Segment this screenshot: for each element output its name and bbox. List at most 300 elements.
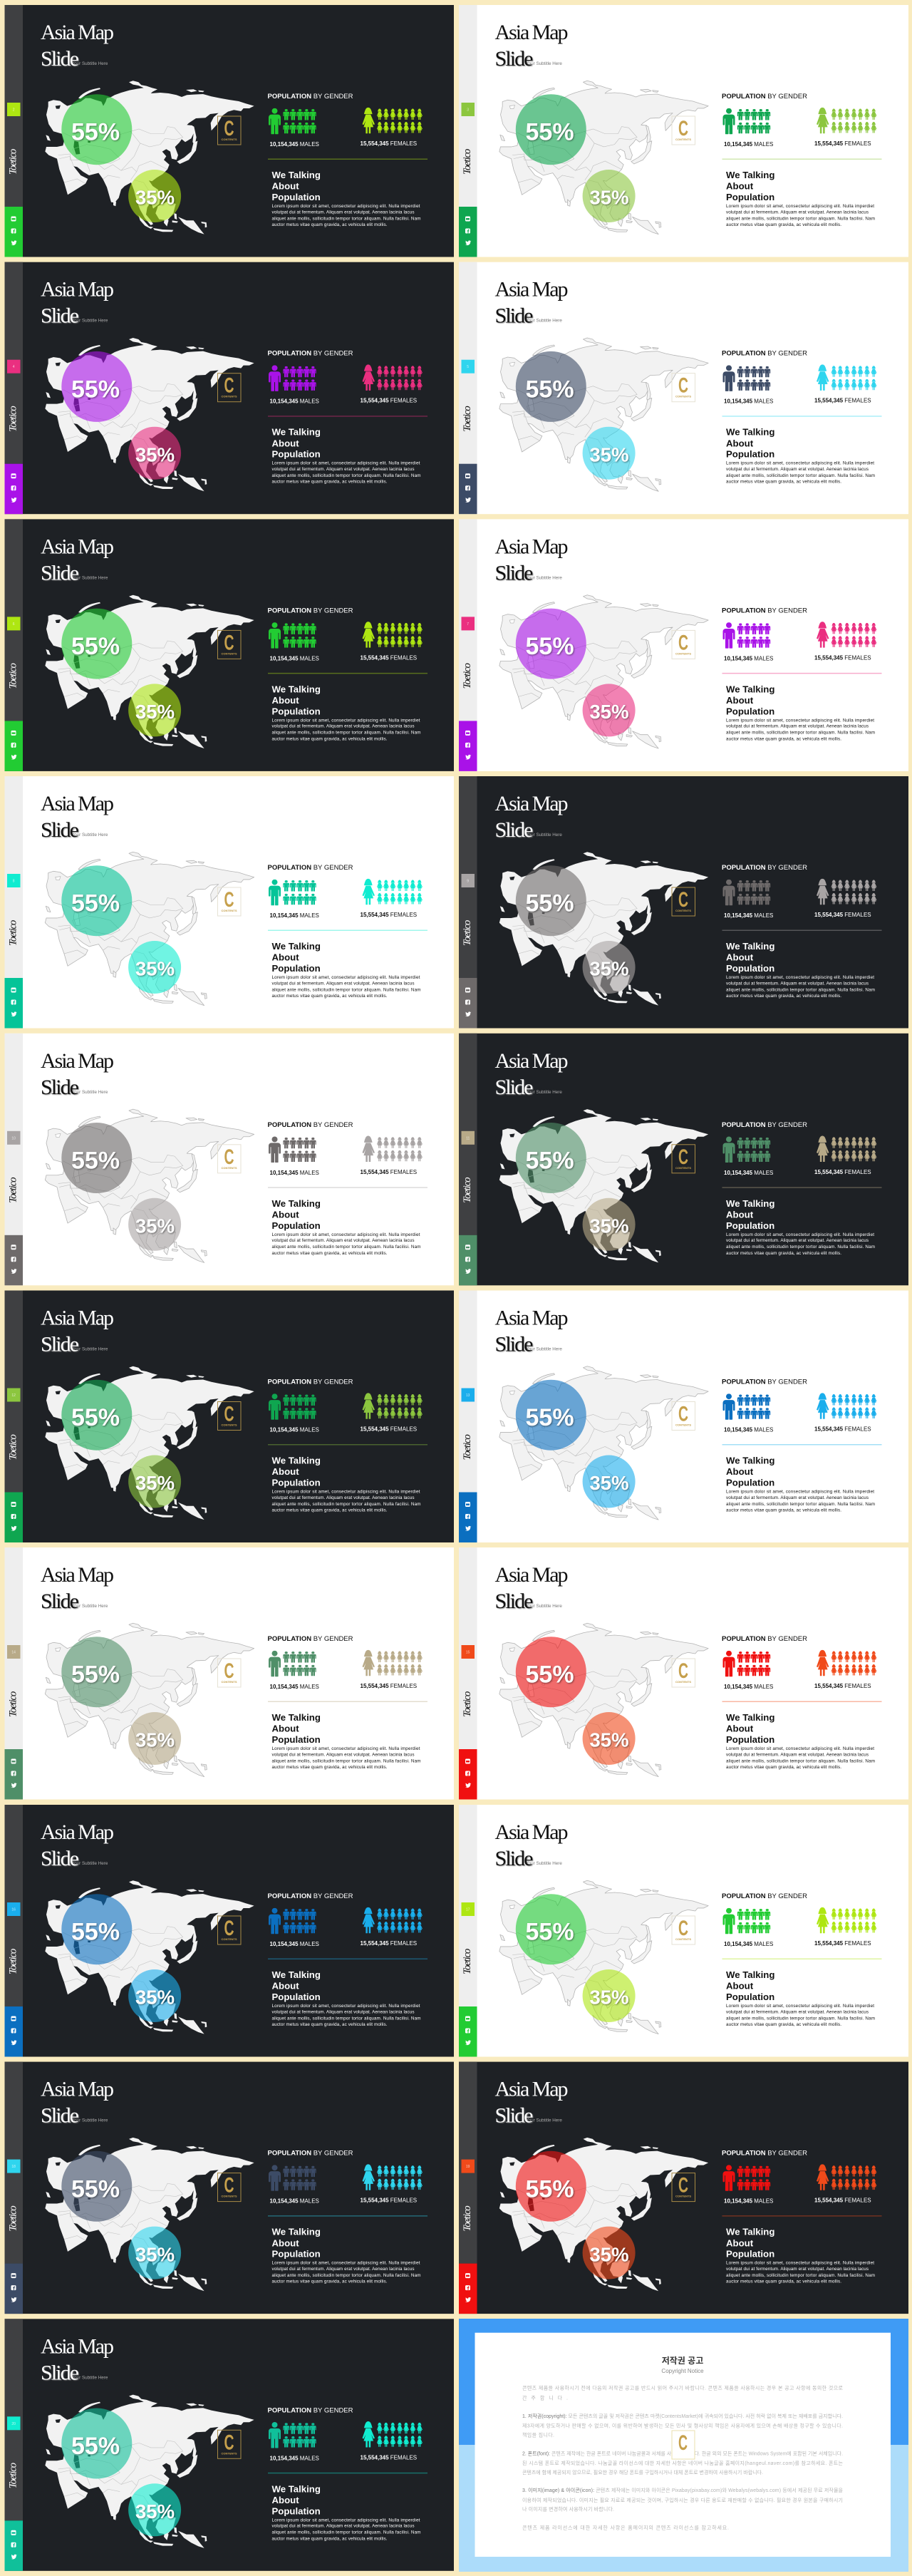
paragraph: volutpat dui at fermentum. Aliquam erat volutpat. Aenean lacinia lacus — [272, 1752, 415, 1757]
paragraph: auctor metus vitae quam gravida, ac vehicula elit mollis. — [726, 1251, 841, 1256]
text heading — [272, 684, 321, 716]
text heading: About — [272, 181, 299, 192]
circle 35% — [583, 170, 636, 222]
page badge — [7, 1131, 20, 1145]
text heading: About — [726, 695, 754, 706]
text heading: Population — [726, 706, 774, 716]
paragraph — [726, 2261, 875, 2284]
title: Asia Map — [41, 2334, 114, 2358]
circle 35% — [128, 941, 181, 994]
title: Slide — [41, 2104, 79, 2128]
circle 55% — [516, 2151, 586, 2222]
sidebar — [4, 519, 23, 771]
circle 35%: 35% — [590, 1729, 629, 1751]
female pictogram — [362, 622, 423, 648]
paragraph — [272, 204, 420, 227]
text heading: About — [272, 438, 299, 448]
text heading — [726, 2227, 774, 2260]
social icons — [465, 1759, 471, 1788]
brand: Toetico — [7, 662, 19, 689]
brand: Toetico — [7, 2205, 19, 2232]
logo — [672, 887, 695, 916]
circle 55% — [61, 865, 132, 936]
circle 35% — [583, 1456, 636, 1508]
title — [41, 278, 114, 328]
map — [499, 1366, 708, 1520]
paragraph: volutpat dui at fermentum. Aliquam erat volutpat. Aenean lacinia lacus — [726, 2267, 869, 2272]
text heading: Population — [272, 963, 321, 974]
male pictogram — [269, 1136, 316, 1163]
title: Asia Map — [494, 2078, 569, 2101]
heading: population: POPULATION BY GENDER — [722, 93, 807, 101]
subtitle: Your Subtitle Here — [526, 833, 562, 838]
title: Asia Map — [41, 1306, 114, 1330]
circle 35% — [128, 1198, 181, 1251]
text heading: We Talking — [726, 427, 774, 438]
paragraph: volutpat dui at fermentum. Aliquam erat volutpat. Aenean lacinia lacus — [726, 1495, 869, 1500]
paragraph: Lorem ipsum dolor sit amet, consectetur adipiscing elit. Nulla imperdiet — [726, 1232, 874, 1237]
paragraph: auctor metus vitae quam gravida, ac vehicula elit mollis. — [272, 994, 388, 999]
circle 55% — [61, 2151, 132, 2222]
paragraph: Lorem ipsum dolor sit amet, consectetur adipiscing elit. Nulla imperdiet — [726, 2004, 874, 2009]
social icons — [11, 1245, 17, 1274]
paragraph: aliquet ante mollis, sollicitudin tempor tortor aliquam. Nulla facilisi. Nam — [272, 2016, 420, 2021]
brand: Toetico — [7, 919, 19, 946]
female count: 15,554,345 FEMALES — [814, 398, 871, 404]
female pictogram — [362, 1907, 423, 1934]
paragraph: auctor metus vitae quam gravida, ac vehicula elit mollis. — [272, 480, 388, 485]
panel: copyright notice — [459, 2319, 908, 2572]
brand: Toetico — [462, 662, 473, 689]
heading: population: POPULATION BY GENDER — [722, 864, 807, 872]
male pictogram — [722, 1908, 770, 1934]
social icons — [465, 1502, 471, 1531]
paragraph: aliquet ante mollis, sollicitudin tempor tortor aliquam. Nulla facilisi. Nam — [726, 1758, 875, 1763]
text heading: We Talking — [726, 1198, 774, 1209]
text heading — [272, 2227, 321, 2260]
paragraph: volutpat dui at fermentum. Aliquam erat volutpat. Aenean lacinia lacus — [726, 981, 869, 986]
circle 35% — [583, 1198, 636, 1251]
text heading: About — [726, 181, 754, 192]
text heading — [726, 427, 774, 460]
paragraph: auctor metus vitae quam gravida, ac vehicula elit mollis. — [272, 1508, 388, 1513]
male count: 10,154,345 MALES — [724, 141, 773, 148]
sidebar — [4, 2062, 23, 2314]
map — [45, 1366, 254, 1520]
subtitle: Your Subtitle Here — [71, 1090, 108, 1095]
male pictogram — [722, 880, 770, 906]
male count: 10,154,345 MALES — [724, 1684, 773, 1690]
paragraph — [272, 975, 420, 999]
male pictogram — [269, 108, 316, 135]
title: Asia Map — [494, 21, 569, 44]
title: Asia Map — [494, 278, 569, 302]
panel: slide 5 light navy — [459, 262, 908, 514]
title — [41, 21, 114, 71]
logo — [218, 1145, 241, 1173]
paragraph: auctor metus vitae quam gravida, ac vehicula elit mollis. — [272, 736, 388, 741]
circle 55% — [516, 1894, 586, 1964]
male pictogram — [722, 1393, 770, 1421]
map — [499, 1623, 708, 1777]
title: Asia Map — [494, 1563, 569, 1587]
male pictogram — [269, 1393, 316, 1421]
female pictogram — [817, 1907, 876, 1934]
circle 55% — [516, 865, 586, 936]
text heading — [726, 1198, 774, 1231]
logo: CONTENTS — [675, 909, 691, 912]
logo: CONTENTS — [675, 1680, 691, 1684]
logo: C — [678, 1917, 688, 1940]
paragraph: volutpat dui at fermentum. Aliquam erat volutpat. Aenean lacinia lacus — [272, 981, 415, 986]
heading: population: POPULATION BY GENDER — [722, 607, 807, 614]
female pictogram — [362, 1136, 423, 1163]
title: Slide — [494, 47, 533, 71]
heading: population: POPULATION BY GENDER — [268, 864, 353, 872]
sidebar — [459, 1290, 477, 1542]
page badge — [462, 874, 475, 887]
circle 35% — [583, 1969, 636, 2022]
circle 55%: 55% — [71, 2175, 120, 2203]
female pictogram — [817, 879, 876, 905]
male pictogram — [269, 365, 316, 392]
text heading: About — [272, 952, 299, 963]
paragraph — [272, 2261, 420, 2284]
paragraph: Lorem ipsum dolor sit amet, consectetur adipiscing elit. Nulla imperdiet — [272, 1490, 420, 1494]
logo: CONTENTS — [221, 1937, 237, 1941]
circle 55%: 55% — [526, 1661, 574, 1689]
panel: slide 4 dark purple — [4, 262, 454, 514]
sidebar — [459, 1805, 477, 2057]
text heading: We Talking — [272, 170, 321, 180]
logo — [672, 1916, 695, 1944]
sidebar — [459, 1034, 477, 1285]
map — [45, 81, 254, 235]
subtitle: Your Subtitle Here — [526, 1861, 562, 1866]
notice body: 된 시스템 폰트로 제작되었습니다. 나눔글꼴 라이선스에 대한 자세한 사항은 네이버 나눔글꼴 홈페이지(hangeul.naver.com)를 참고하세요. 폰트는 — [522, 2460, 844, 2466]
circle 35%: 35% — [590, 701, 629, 723]
circle 35%: 35% — [135, 1729, 175, 1751]
paragraph: volutpat dui at fermentum. Aliquam erat volutpat. Aenean lacinia lacus — [272, 2267, 415, 2272]
title: Asia Map — [41, 792, 114, 815]
title: Asia Map — [494, 1306, 569, 1330]
male count: 10,154,345 MALES — [269, 1684, 319, 1690]
page badge — [462, 103, 475, 116]
female pictogram — [362, 364, 423, 391]
sidebar — [4, 1034, 23, 1285]
circle 55% — [516, 94, 586, 165]
paragraph: aliquet ante mollis, sollicitudin tempor tortor aliquam. Nulla facilisi. Nam — [272, 1758, 420, 1763]
page badge: 5 — [467, 365, 469, 369]
female count: 15,554,345 FEMALES — [361, 912, 417, 918]
social icons — [465, 731, 471, 760]
paragraph: auctor metus vitae quam gravida, ac vehicula elit mollis. — [726, 222, 841, 227]
paragraph — [272, 718, 420, 741]
title: Slide — [494, 1590, 533, 1613]
female pictogram — [362, 1393, 423, 1419]
text heading: Population — [272, 2505, 321, 2516]
text heading: We Talking — [726, 684, 774, 694]
female count: 15,554,345 FEMALES — [361, 2198, 417, 2204]
title: Slide — [494, 1076, 533, 1099]
title: Asia Map — [494, 1820, 569, 1844]
page badge — [7, 1645, 20, 1659]
text heading: We Talking — [272, 1712, 321, 1723]
page badge — [462, 617, 475, 630]
map — [45, 2395, 254, 2548]
title: Slide — [494, 561, 533, 584]
social icons — [11, 217, 17, 245]
paragraph — [726, 718, 875, 741]
social icons — [11, 1759, 17, 1788]
circle 55%: 55% — [71, 1404, 120, 1431]
text heading: We Talking — [726, 941, 774, 952]
paragraph — [272, 2004, 420, 2027]
title: Slide — [494, 2104, 533, 2128]
title — [41, 1820, 114, 1870]
logo — [672, 2173, 695, 2202]
text heading: We Talking — [726, 2227, 774, 2237]
title: Asia Map — [41, 2078, 114, 2101]
text heading: Population — [272, 2249, 321, 2260]
heading: population: POPULATION BY GENDER — [268, 2150, 353, 2158]
subtitle: Your Subtitle Here — [71, 1861, 108, 1866]
logo: CONTENTS — [221, 2451, 237, 2455]
page badge: 4 — [13, 365, 15, 369]
female pictogram — [817, 364, 876, 391]
page badge — [462, 1131, 475, 1145]
circle 55% — [61, 1123, 132, 1193]
logo: C — [678, 2174, 688, 2198]
logo: CONTENTS — [675, 395, 691, 398]
social icons — [11, 731, 17, 760]
title: Asia Map — [494, 535, 569, 558]
circle 55% — [61, 94, 132, 165]
logo: CONTENTS — [675, 651, 691, 655]
title — [494, 21, 569, 71]
page badge: 8 — [13, 880, 15, 884]
brand: Toetico — [7, 2462, 19, 2488]
map — [45, 1109, 254, 1262]
text heading — [726, 941, 774, 974]
female pictogram — [362, 1650, 423, 1676]
heading: population: POPULATION BY GENDER — [722, 350, 807, 358]
circle 35%: 35% — [590, 187, 629, 209]
text heading: We Talking — [272, 2483, 321, 2494]
social icons — [465, 2016, 471, 2045]
panel: slide 14 light sage — [4, 1547, 454, 1799]
logo: C — [224, 631, 234, 654]
circle 55%: 55% — [526, 1404, 574, 1431]
panel: slide 11 dark sage — [459, 1034, 908, 1285]
title: Slide — [41, 1847, 79, 1870]
text heading: We Talking — [272, 684, 321, 694]
sidebar — [4, 1547, 23, 1799]
circle 35%: 35% — [135, 701, 175, 723]
circle 55% — [516, 1123, 586, 1193]
circle 55% — [516, 1637, 586, 1707]
paragraph: aliquet ante mollis, sollicitudin tempor tortor aliquam. Nulla facilisi. Nam — [272, 216, 420, 221]
paragraph: Lorem ipsum dolor sit amet, consectetur adipiscing elit. Nulla imperdiet — [272, 1746, 420, 1751]
text heading — [272, 1712, 321, 1745]
circle 55% — [516, 609, 586, 679]
paragraph: volutpat dui at fermentum. Aliquam erat volutpat. Aenean lacinia lacus — [272, 210, 415, 215]
title — [494, 1049, 569, 1099]
paragraph: auctor metus vitae quam gravida, ac vehicula elit mollis. — [726, 736, 841, 741]
text heading: We Talking — [272, 1969, 321, 1980]
page badge: 15 — [466, 1651, 470, 1655]
paragraph — [726, 1490, 875, 1513]
logo: C — [224, 2431, 234, 2454]
brand: Toetico — [462, 148, 473, 175]
notice body: 콘텐츠 제품을 사용하시기 전에 다음의 저작권 공고를 반드시 읽어 주시기 바랍니다. 콘텐츠 제품을 사용하시는 경우 본 공고 사항에 동의한 것으로 — [522, 2385, 844, 2391]
circle 55%: 55% — [526, 890, 574, 917]
circle 35%: 35% — [590, 2243, 629, 2265]
panel: slide 3 light green — [459, 5, 908, 257]
logo: CONTENTS — [221, 395, 237, 398]
logo: centre watermark — [672, 2431, 695, 2459]
circle 55% — [61, 1894, 132, 1964]
paragraph: auctor metus vitae quam gravida, ac vehicula elit mollis. — [272, 2022, 388, 2027]
text heading — [726, 1456, 774, 1488]
male pictogram — [269, 2165, 316, 2192]
page badge — [7, 360, 20, 373]
social icons — [465, 1245, 471, 1274]
title: Slide — [41, 818, 79, 842]
page badge: 6 — [13, 622, 15, 627]
social icons — [11, 2016, 17, 2045]
female pictogram — [362, 879, 423, 905]
paragraph: aliquet ante mollis, sollicitudin tempor tortor aliquam. Nulla facilisi. Nam — [272, 987, 420, 992]
text heading: Population — [272, 192, 321, 202]
social icons — [11, 1502, 17, 1531]
paragraph — [272, 1490, 420, 1513]
title: Slide — [41, 2361, 79, 2384]
circle 55% — [61, 1380, 132, 1451]
title — [494, 1306, 569, 1356]
paragraph: volutpat dui at fermentum. Aliquam erat volutpat. Aenean lacinia lacus — [726, 2009, 869, 2014]
title: Slide — [494, 1847, 533, 1870]
title — [494, 1563, 569, 1613]
paragraph: volutpat dui at fermentum. Aliquam erat volutpat. Aenean lacinia lacus — [726, 1238, 869, 1243]
text heading: About — [726, 952, 754, 963]
male count: 10,154,345 MALES — [724, 1427, 773, 1433]
text heading: About — [272, 2495, 299, 2505]
logo — [218, 1659, 241, 1687]
circle 35%: 35% — [135, 1215, 175, 1237]
circle 35% — [128, 2483, 181, 2536]
logo: C — [224, 374, 234, 398]
text heading: Population — [272, 1734, 321, 1745]
logo: CONTENTS — [221, 1680, 237, 1684]
sidebar — [459, 2062, 477, 2314]
female count: 15,554,345 FEMALES — [814, 1426, 871, 1433]
text heading: Population — [272, 1992, 321, 2002]
text heading: Population — [726, 1477, 774, 1488]
logo — [218, 2173, 241, 2202]
title — [494, 1820, 569, 1870]
social icons — [465, 217, 471, 245]
page badge: 19 — [466, 2165, 470, 2169]
logo: C — [224, 888, 234, 912]
paragraph — [726, 1746, 875, 1770]
logo — [672, 1145, 695, 1173]
heading: population: POPULATION BY GENDER — [268, 1635, 353, 1643]
page badge: 11 — [466, 1136, 470, 1140]
subtitle: Your Subtitle Here — [71, 61, 108, 66]
logo — [672, 373, 695, 402]
logo: C — [678, 631, 688, 654]
circle 35% — [128, 1456, 181, 1508]
logo: C — [224, 1917, 234, 1940]
paragraph — [726, 975, 875, 999]
notice body: 간주합니다. — [522, 2395, 568, 2401]
circle 35%: 35% — [135, 443, 175, 465]
female count: 15,554,345 FEMALES — [814, 654, 871, 661]
paragraph: Lorem ipsum dolor sit amet, consectetur adipiscing elit. Nulla imperdiet — [272, 2004, 420, 2009]
brand: Toetico — [7, 1434, 19, 1460]
text heading: About — [272, 1724, 299, 1734]
brand: Toetico — [7, 1691, 19, 1717]
notice body — [522, 2385, 844, 2530]
paragraph: Lorem ipsum dolor sit amet, consectetur adipiscing elit. Nulla imperdiet — [272, 2261, 420, 2266]
circle 55% — [61, 2408, 132, 2479]
text heading: We Talking — [272, 2227, 321, 2237]
panel: slide 20 dark teal — [4, 2319, 454, 2571]
text heading: About — [272, 2237, 299, 2248]
male count: 10,154,345 MALES — [269, 655, 319, 661]
circle 55%: 55% — [71, 376, 120, 403]
logo: C — [678, 1145, 688, 1169]
paragraph: aliquet ante mollis, sollicitudin tempor tortor aliquam. Nulla facilisi. Nam — [726, 987, 875, 992]
text heading: About — [726, 438, 754, 448]
circle 35% — [583, 1712, 636, 1765]
text heading: We Talking — [726, 1969, 774, 1980]
panel: slide 13 light blue — [459, 1290, 908, 1542]
title — [41, 1563, 114, 1613]
paragraph: auctor metus vitae quam gravida, ac vehicula elit mollis. — [272, 2536, 388, 2541]
female pictogram — [817, 1393, 876, 1419]
heading: population: POPULATION BY GENDER — [268, 2406, 353, 2414]
map — [499, 2138, 708, 2291]
paragraph: auctor metus vitae quam gravida, ac vehicula elit mollis. — [726, 480, 841, 485]
subtitle: Your Subtitle Here — [526, 1347, 562, 1351]
text heading — [726, 1712, 774, 1745]
logo: CONTENTS — [221, 1166, 237, 1170]
female count: 15,554,345 FEMALES — [814, 1940, 871, 1947]
subtitle: Your Subtitle Here — [71, 319, 108, 324]
text heading: About — [272, 1210, 299, 1220]
logo — [672, 1401, 695, 1430]
logo: C — [678, 374, 688, 398]
male pictogram — [722, 622, 770, 649]
circle 35%: 35% — [135, 2243, 175, 2265]
paragraph: Lorem ipsum dolor sit amet, consectetur adipiscing elit. Nulla imperdiet — [726, 2261, 874, 2266]
sidebar — [459, 776, 477, 1028]
circle 35%: 35% — [135, 1987, 175, 2009]
heading: population: POPULATION BY GENDER — [722, 2150, 807, 2158]
text heading: Population — [726, 1734, 774, 1745]
brand: Toetico — [7, 1948, 19, 1974]
paragraph: aliquet ante mollis, sollicitudin tempor tortor aliquam. Nulla facilisi. Nam — [272, 731, 420, 736]
text heading: About — [726, 1210, 754, 1220]
notice card — [475, 2333, 891, 2557]
paragraph: aliquet ante mollis, sollicitudin tempor tortor aliquam. Nulla facilisi. Nam — [726, 2273, 875, 2278]
male count: 10,154,345 MALES — [269, 2455, 319, 2461]
map — [499, 338, 708, 491]
logo — [218, 887, 241, 916]
paragraph: auctor metus vitae quam gravida, ac vehicula elit mollis. — [272, 1251, 388, 1256]
